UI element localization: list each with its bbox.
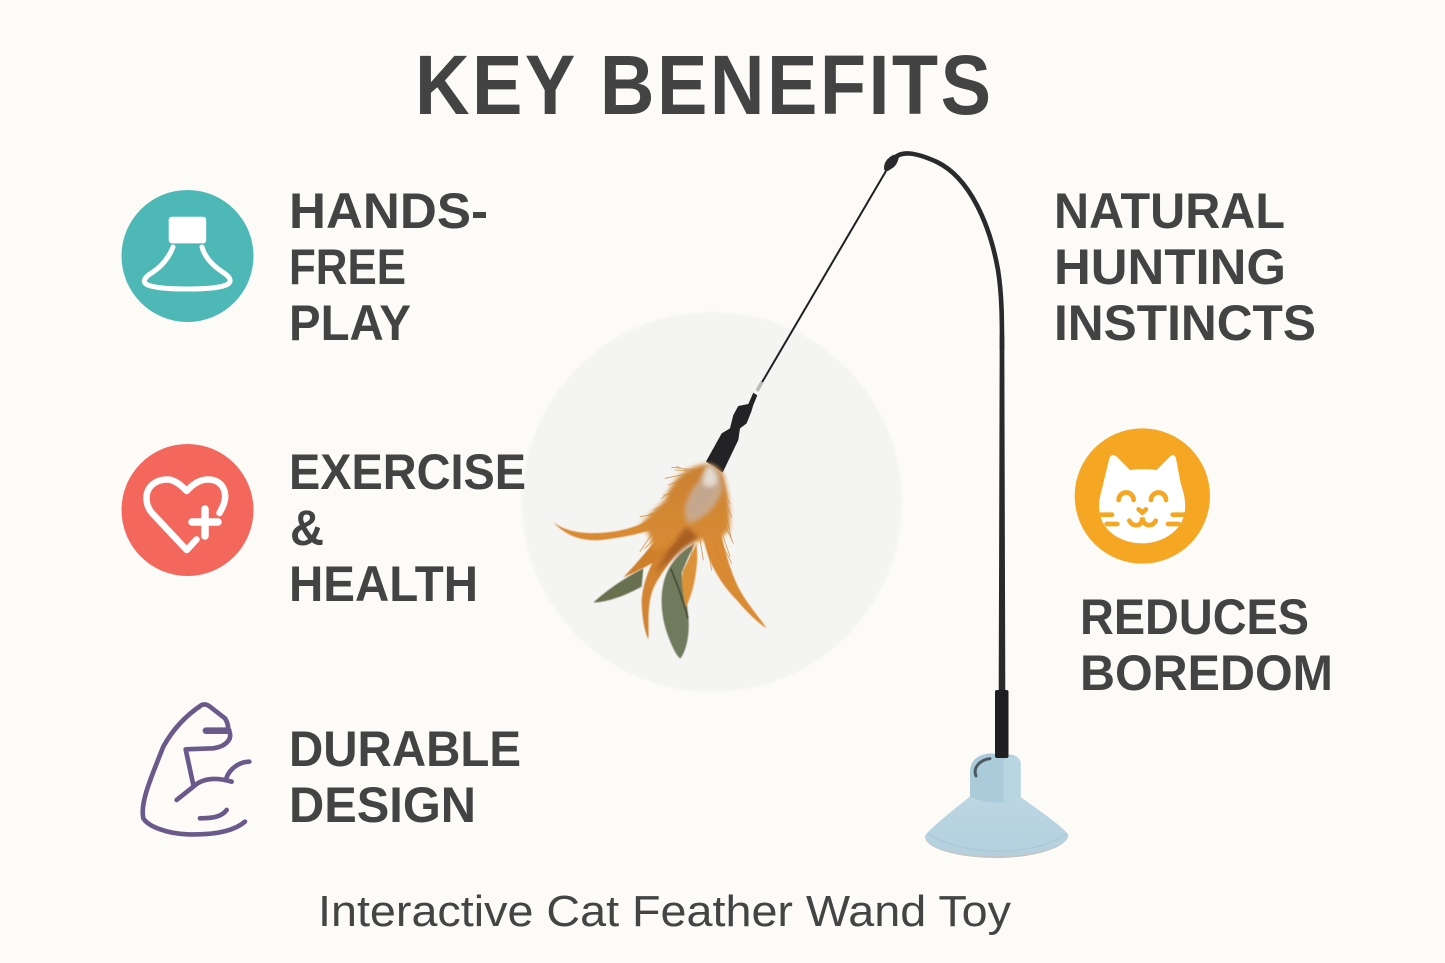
icon: suction cup — [122, 190, 254, 322]
icon: heart with plus — [122, 444, 254, 576]
text: exercise and health: HEALTH — [289, 556, 478, 612]
benefit: natural hunting instincts: INSTINCTS — [1054, 295, 1316, 351]
rod lower section — [999, 335, 1005, 692]
feather lure — [553, 393, 767, 658]
text: hands-free play: PLAY — [289, 295, 411, 351]
product: feather wand toy — [553, 153, 1068, 858]
benefit: hands-free play — [122, 183, 488, 351]
ferrule — [757, 382, 762, 391]
feather strands — [640, 467, 733, 573]
benefit: exercise and health — [122, 444, 526, 612]
feather fluff — [640, 464, 730, 550]
icon: flexed arm — [143, 704, 249, 834]
benefit: durable design — [143, 704, 521, 834]
text: durable design — [289, 721, 521, 833]
benefit: natural hunting instincts: HUNTING — [1054, 239, 1286, 295]
orange feathers — [553, 513, 767, 639]
text: hands-free play: HANDS- — [289, 183, 488, 239]
flexible rod — [893, 153, 1002, 350]
icon: smiling cat — [1075, 428, 1210, 564]
pale center — [685, 465, 722, 523]
backdrop circle — [522, 312, 902, 692]
rod sleeve — [995, 690, 1008, 758]
suction base — [925, 753, 1068, 858]
string — [761, 171, 886, 384]
text: exercise and health: EXERCISE — [289, 444, 526, 500]
caption: Interactive Cat Feather Wand Toy — [318, 887, 1011, 936]
text: reduces boredom: BOREDOM — [1080, 645, 1333, 701]
text: exercise and health — [289, 444, 526, 612]
text: reduces boredom — [1080, 589, 1333, 701]
benefit: natural hunting instincts — [1054, 183, 1316, 351]
green feathers — [593, 543, 695, 658]
text: reduces boredom: REDUCES — [1080, 589, 1309, 645]
text: durable design: DURABLE — [289, 721, 521, 777]
benefit: reduces boredom — [1075, 428, 1333, 701]
text: exercise and health: & — [290, 500, 324, 556]
text: durable design: DESIGN — [289, 777, 476, 833]
text: hands-free play — [289, 183, 488, 351]
rod tip — [884, 154, 899, 171]
title: KEY BENEFITS — [415, 38, 991, 132]
benefit: natural hunting instincts: NATURAL — [1054, 183, 1285, 239]
text: hands-free play: FREE — [289, 239, 406, 295]
holder — [706, 393, 757, 473]
